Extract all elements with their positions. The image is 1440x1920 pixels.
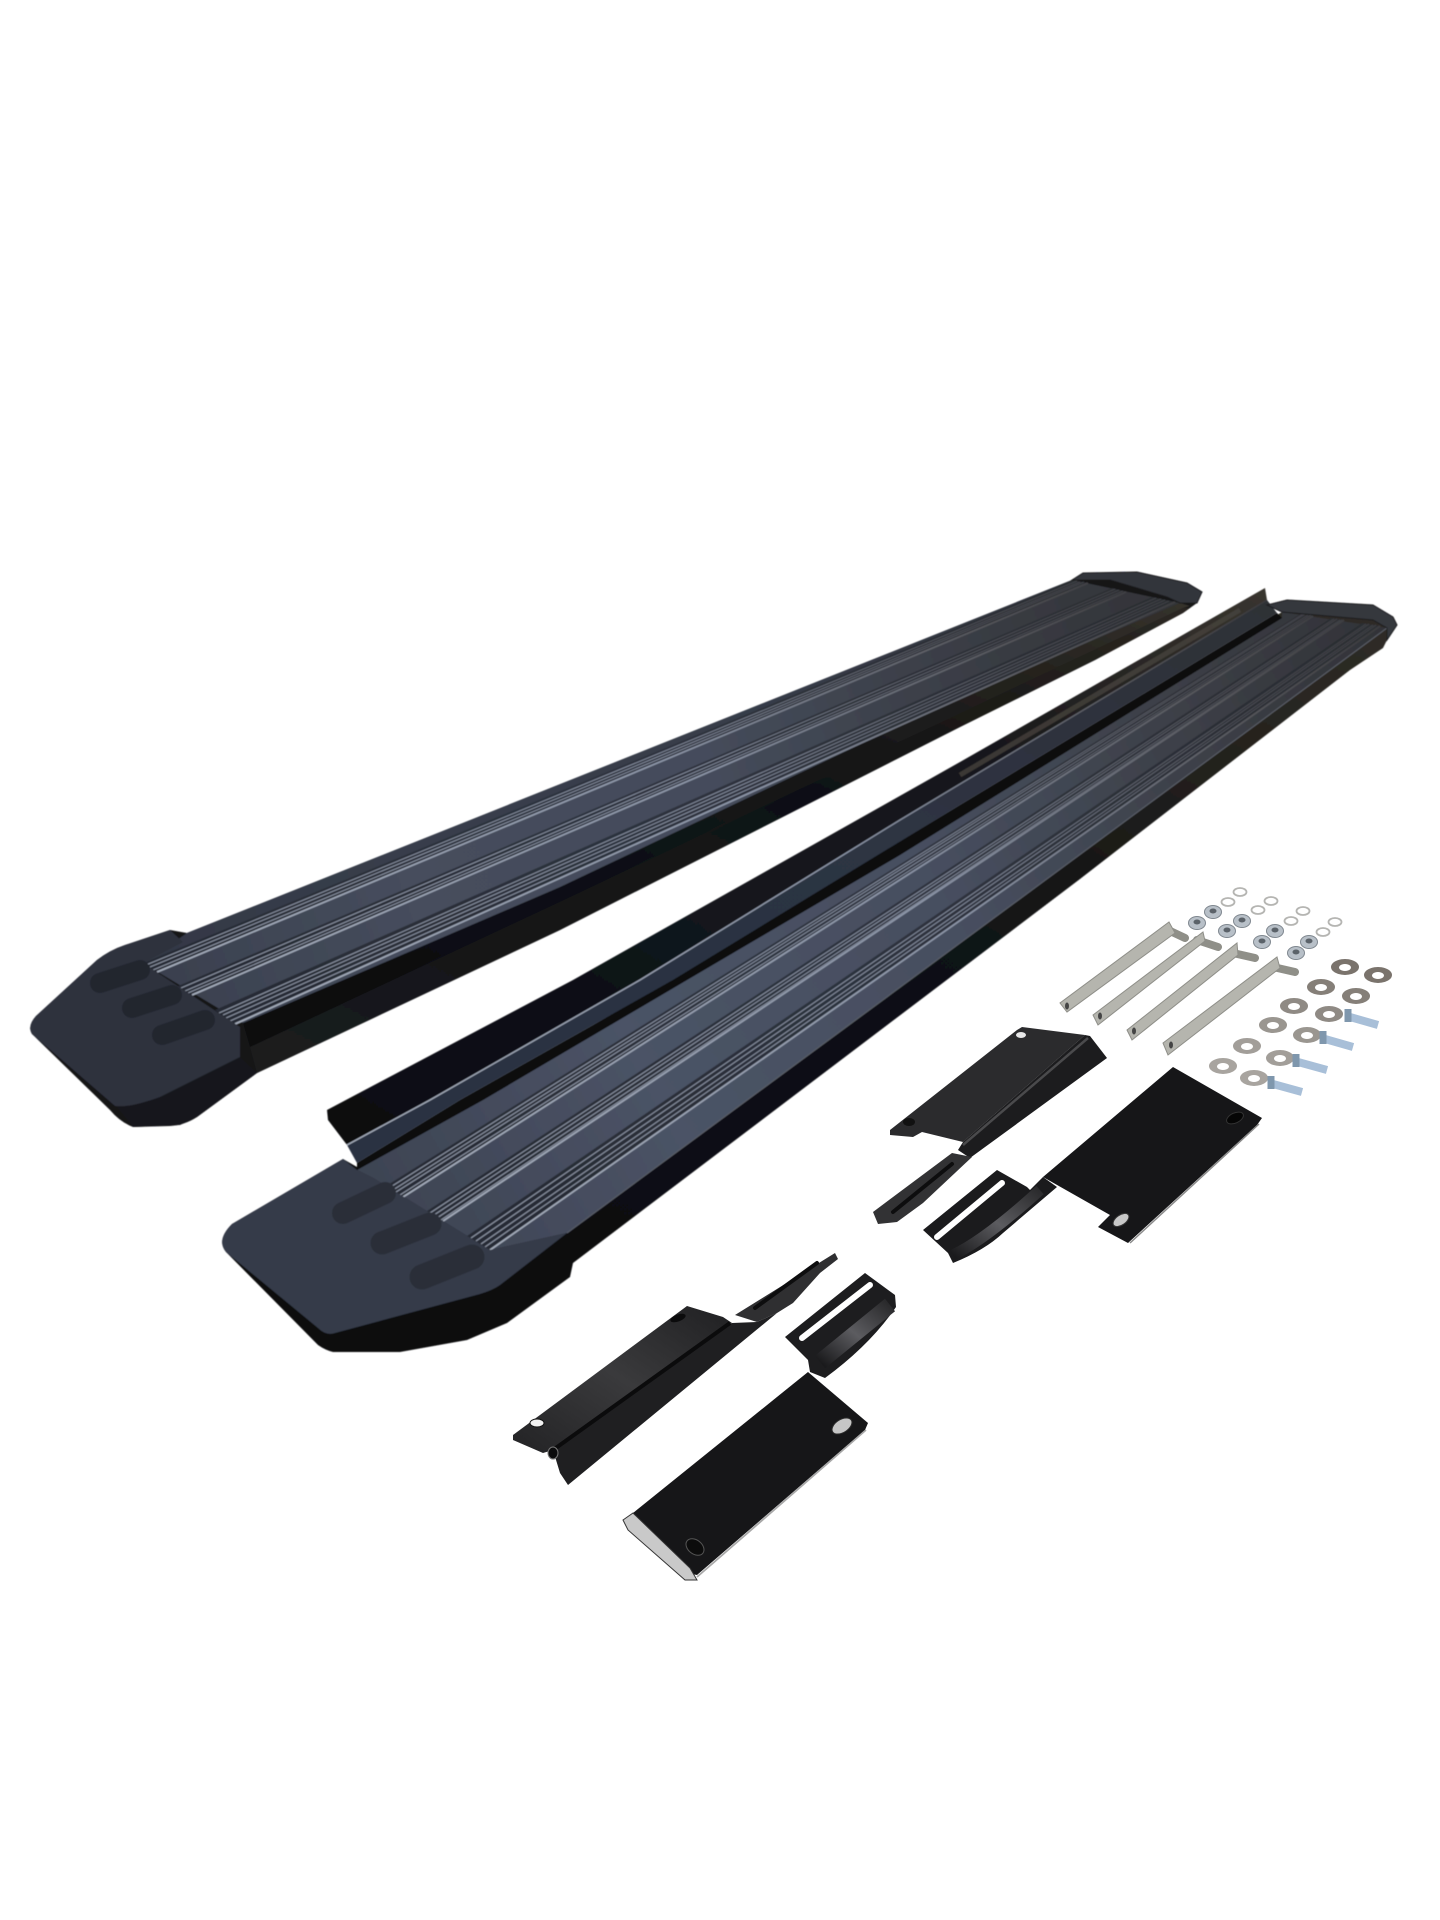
washers xyxy=(1209,959,1392,1086)
strap 3 xyxy=(1127,943,1238,1040)
right board far end cap xyxy=(1267,600,1397,640)
left running board xyxy=(30,572,1202,1127)
bolts xyxy=(1271,1009,1378,1092)
right board rib grooves xyxy=(386,614,1380,1250)
upper bracket with slotted tab xyxy=(873,1027,1107,1224)
lower bracket slot xyxy=(755,1263,817,1308)
right board tread edge xyxy=(567,628,1387,1233)
lower left bracket xyxy=(513,1253,838,1485)
left board silhouette xyxy=(30,572,1202,1127)
left board near end cap xyxy=(30,930,240,1106)
upper bracket lower face xyxy=(958,1035,1107,1158)
right board rib highlights xyxy=(389,614,1376,1247)
left board lower side strip xyxy=(250,608,1190,1073)
nuts xyxy=(1188,906,1318,960)
upper bracket crease xyxy=(963,1038,1088,1145)
bolt heads xyxy=(1271,1009,1348,1089)
strap 2 xyxy=(1093,932,1205,1025)
left board rib grooves xyxy=(143,580,1175,1024)
flat bracket edge xyxy=(1130,1124,1259,1243)
flat bracket arm xyxy=(923,1170,1057,1263)
channel wall far highlight xyxy=(960,610,1240,775)
upper bracket plate xyxy=(890,1027,1085,1142)
lower bracket crease xyxy=(553,1323,730,1450)
lower flat bracket arm highlight xyxy=(820,1305,890,1362)
right board near end cap xyxy=(222,1159,567,1334)
lower bracket holes xyxy=(530,1419,544,1427)
left board upper side strip xyxy=(243,603,1190,1047)
right board cap pads xyxy=(343,1193,472,1277)
channel wall xyxy=(327,588,1267,1145)
channel groove xyxy=(357,613,1282,1170)
strap 4 xyxy=(1163,957,1280,1055)
left board cap pads xyxy=(100,970,205,1035)
lower bracket tab xyxy=(735,1253,838,1322)
bolt shafts xyxy=(1273,1017,1378,1092)
right board sweep channel xyxy=(327,588,1282,1170)
left board near end cap side xyxy=(117,1057,257,1127)
flat bracket arm slot xyxy=(937,1183,1002,1237)
lower flat bracket flange xyxy=(623,1513,697,1580)
lower flat bracket holes xyxy=(829,1415,855,1437)
mounting straps xyxy=(1060,922,1295,1055)
right board ribbed tread xyxy=(357,612,1387,1250)
flat bracket arm highlight xyxy=(953,1190,1040,1255)
channel highlight xyxy=(347,600,1267,1145)
lock washers xyxy=(1222,888,1342,936)
lower flat bracket arm slot xyxy=(802,1285,870,1338)
lower flat bracket arm xyxy=(785,1273,896,1378)
strap 1 xyxy=(1060,922,1175,1012)
lower flat bracket xyxy=(623,1273,896,1580)
flat bracket with arm xyxy=(923,1067,1262,1263)
nut holes xyxy=(1194,908,1312,954)
right board silhouette xyxy=(222,600,1397,1352)
left board rib highlights xyxy=(146,581,1169,1021)
upper bracket slot xyxy=(893,1164,952,1212)
left board ribbed tread xyxy=(143,580,1180,1023)
strap holes xyxy=(1065,1002,1173,1048)
strap studs xyxy=(1168,930,1295,972)
flat bracket plate xyxy=(1043,1067,1262,1243)
right running board xyxy=(222,588,1397,1352)
upper bracket tab xyxy=(873,1153,972,1224)
lower bracket lower face xyxy=(553,1313,777,1485)
lower flat bracket plate xyxy=(633,1372,868,1575)
left board upper flat band xyxy=(143,580,1073,963)
channel shelf xyxy=(347,600,1277,1163)
left board far end cap xyxy=(1072,572,1202,603)
lower bracket plate xyxy=(513,1306,732,1453)
lower flat bracket edge xyxy=(697,1430,866,1577)
flat bracket holes xyxy=(1225,1110,1245,1126)
upper bracket holes xyxy=(1016,1032,1026,1038)
